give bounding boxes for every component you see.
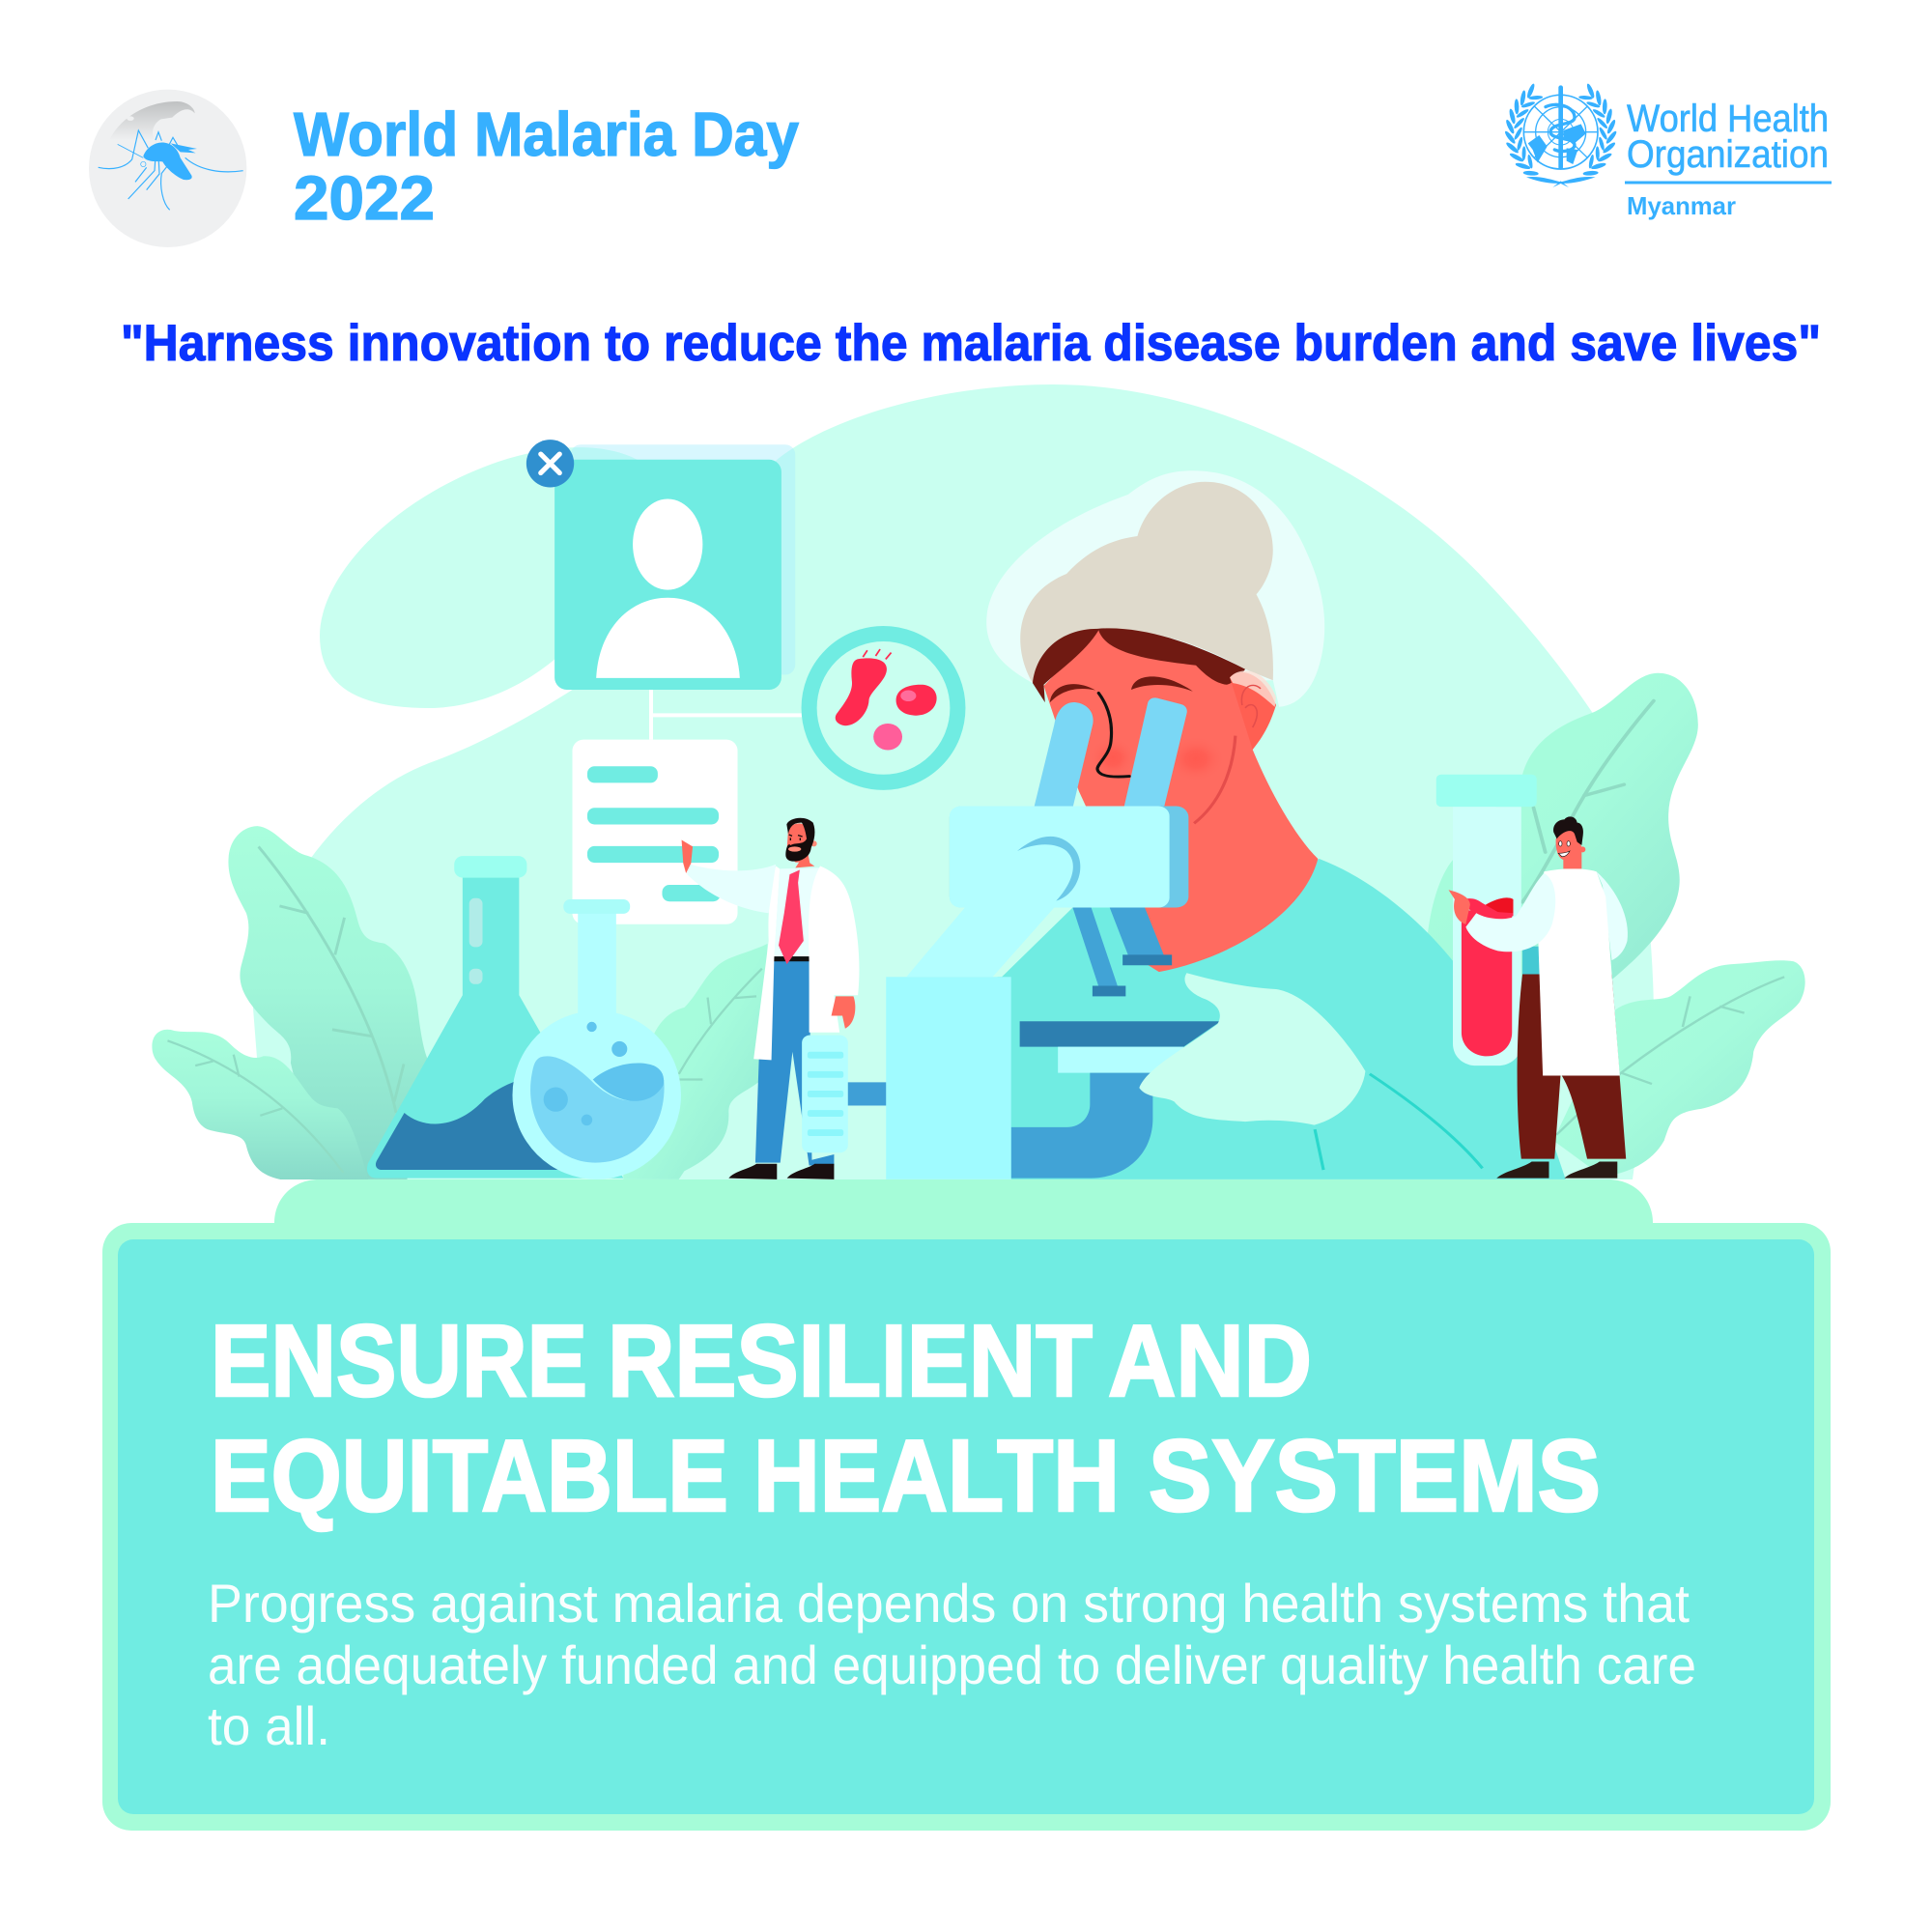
panel heading: EQUITABLE	[211, 1419, 728, 1533]
panel fill	[118, 1239, 1814, 1814]
close badge	[526, 440, 574, 487]
background blob	[252, 384, 1654, 1179]
scientist bun	[1020, 482, 1273, 683]
info panel	[102, 1179, 1831, 1831]
title	[294, 99, 799, 233]
campaign quote: "Harness innovation to reduce the malaria disease burden and save lives"	[121, 315, 1821, 372]
WHO wordmark: Organization	[1627, 133, 1829, 176]
microscope	[886, 697, 1221, 1179]
big left leaf	[228, 826, 429, 1179]
conical flask	[367, 856, 623, 1179]
panel body text	[208, 1573, 1696, 1756]
trousers and shoes	[728, 957, 834, 1179]
leaf behind flask	[623, 944, 768, 1179]
round flask	[512, 899, 681, 1179]
left doctor head	[785, 818, 817, 867]
left small doctor	[682, 840, 859, 1179]
petri dish with parasites	[810, 634, 957, 782]
face details	[1050, 676, 1236, 823]
hairnet	[986, 470, 1324, 707]
illustration	[152, 384, 1805, 1180]
document	[572, 740, 738, 924]
right small doctor body	[1449, 868, 1628, 1179]
profile card	[554, 444, 795, 690]
title: 2022	[294, 163, 435, 233]
right laurel	[1578, 83, 1618, 176]
scientist face and neck	[1043, 631, 1318, 972]
scientist body	[993, 859, 1566, 1179]
scientist sleeve	[1139, 973, 1365, 1125]
panel border	[102, 1223, 1831, 1831]
header: mosquito globe badge	[89, 90, 246, 247]
ear	[1230, 670, 1276, 750]
microscope connector	[844, 1082, 888, 1105]
panel heading: SYSTEMS	[1149, 1419, 1601, 1533]
staff and serpent	[1546, 88, 1575, 167]
coat fold lines	[1315, 1074, 1483, 1170]
platform	[274, 1179, 1653, 1246]
right plants	[844, 470, 1805, 1179]
right doctor head	[1553, 816, 1585, 868]
continents	[1528, 124, 1586, 164]
left laurel	[1504, 83, 1543, 176]
fringe	[1033, 628, 1245, 702]
globe	[1523, 95, 1598, 169]
title: World Malaria Day	[294, 99, 799, 169]
WHO wordmark: Myanmar	[1627, 191, 1736, 220]
small right leaf	[1553, 960, 1805, 1177]
panel heading: AND	[1108, 1304, 1312, 1418]
WHO wordmark	[1625, 98, 1832, 220]
panel heading: HEALTH	[753, 1419, 1120, 1533]
big right leaf	[1427, 673, 1698, 980]
small left leaf	[152, 1030, 368, 1180]
WHO emblem	[1504, 83, 1618, 187]
panel heading: ENSURE	[211, 1304, 587, 1418]
test tube	[1436, 775, 1537, 1065]
eyepiece tube	[802, 1036, 848, 1152]
panel heading: RESILIENT	[608, 1304, 1093, 1418]
shirt and tie	[773, 867, 820, 964]
panel body text: Progress against malaria depends on strong health systems that	[208, 1573, 1690, 1634]
lab coat	[753, 867, 859, 1060]
left plants and lab equipment	[152, 440, 957, 1180]
ribbon	[1526, 177, 1596, 187]
pointing arm	[682, 840, 855, 1029]
panel body text: to all.	[208, 1695, 330, 1756]
panel body text: are adequately funded and equipped to deliver quality health care	[208, 1634, 1696, 1695]
connector lines	[651, 690, 802, 740]
panel heading	[211, 1304, 1601, 1533]
WHO wordmark: World Health	[1627, 98, 1829, 140]
